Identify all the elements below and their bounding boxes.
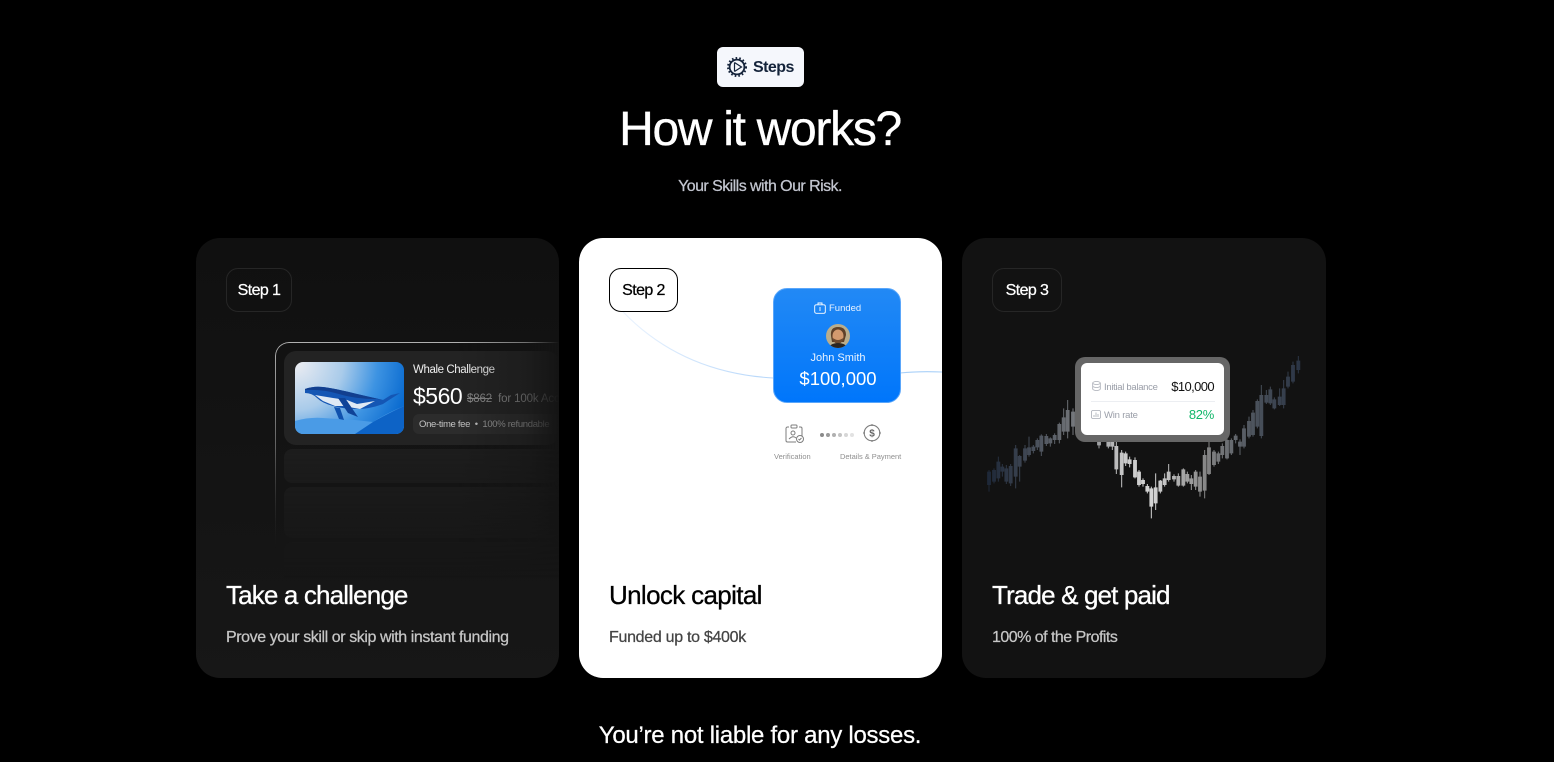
step 3 pill — [992, 268, 1062, 312]
badge: steps — [717, 47, 804, 87]
progress dots — [820, 433, 854, 437]
card heading: Take a challenge — [226, 580, 408, 610]
fee tag — [413, 414, 559, 434]
details label: Details & Payment — [840, 452, 901, 461]
divider — [1091, 401, 1215, 402]
step 1 pill — [226, 268, 292, 312]
title: How it works? — [619, 103, 901, 156]
funded amount: $100,000 — [799, 368, 877, 389]
step 3 pill: Step 3 — [1006, 282, 1048, 299]
price: $560 — [413, 383, 462, 409]
right edge fade — [465, 342, 559, 459]
win rate label: Win rate — [1104, 410, 1138, 421]
icon: verification — [786, 424, 804, 443]
icon: gear with play arrow — [727, 57, 747, 77]
card text: Prove your skill or skip with instant funding — [226, 629, 509, 646]
candle wicks — [989, 356, 1298, 518]
icon: dollar target: $ — [869, 428, 875, 440]
initial balance value: $10,000 — [1171, 379, 1214, 394]
step 2 pill — [609, 268, 678, 312]
empty row 1 — [284, 449, 498, 478]
icon: database — [1092, 381, 1101, 391]
card text: 100% of the Profits — [992, 629, 1117, 646]
connector curve — [622, 312, 942, 378]
icon: dollar target — [863, 424, 881, 442]
stats card inner — [1081, 363, 1224, 435]
footer statement: You’re not liable for any losses. — [599, 722, 921, 749]
verification label: Verification — [774, 452, 811, 461]
win rate value: 82% — [1189, 407, 1214, 422]
fee tag: One-time fee • 100% refundable — [419, 419, 549, 430]
mockup frame — [275, 342, 556, 521]
funded label: Funded — [829, 303, 861, 314]
challenge mockup — [275, 342, 557, 521]
whale image — [295, 362, 404, 434]
empty row 2 — [284, 487, 559, 538]
subtitle: Your Skills with Our Risk. — [678, 178, 842, 195]
candlestick chart — [987, 356, 1300, 518]
candle bodies — [989, 361, 1298, 507]
step 2 pill: Step 2 — [622, 282, 665, 299]
icon: chart — [1091, 410, 1101, 419]
panel: step 2 unlock capital — [579, 238, 942, 678]
challenge offer card — [284, 351, 559, 445]
card heading: Trade & get paid — [992, 580, 1170, 610]
funded card — [773, 288, 901, 403]
progress steps — [774, 424, 902, 461]
initial balance label: Initial balance — [1104, 382, 1158, 393]
icon: funded case — [814, 302, 826, 314]
panel: step 1 take a challenge — [196, 238, 559, 678]
card text: Funded up to $400k — [609, 629, 746, 646]
card heading: Unlock capital — [609, 580, 762, 610]
empty row 3 — [284, 542, 559, 582]
offer name: Whale Challenge — [413, 364, 495, 376]
avatar — [826, 324, 850, 348]
step 1 pill: Step 1 — [238, 282, 280, 299]
name: John Smith — [810, 352, 866, 364]
panel: step 3 trade and get paid — [962, 238, 1326, 678]
badge label: Steps — [753, 59, 794, 76]
stats card — [1075, 357, 1230, 442]
